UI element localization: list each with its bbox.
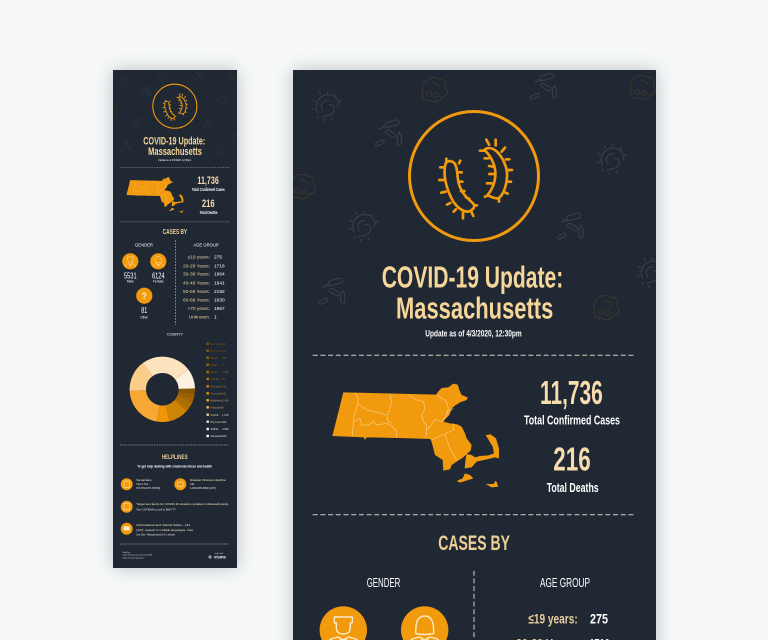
preview: gender and age section: 1967 bbox=[214, 306, 225, 312]
preview: county legend: Essex bbox=[210, 370, 218, 374]
preview panel background bbox=[113, 70, 237, 568]
preview: scaled header and summary bbox=[112, 71, 241, 236]
preview: helplines section: Samaritans bbox=[136, 478, 152, 482]
preview: county legend: 6 bbox=[222, 405, 224, 409]
preview: county heading: COUNTY bbox=[167, 332, 183, 336]
preview: county legend: Dukes bbox=[210, 363, 219, 367]
preview: gender and age section: Male bbox=[127, 280, 134, 284]
panel: small full-length infographic preview bbox=[112, 70, 241, 568]
preview: helplines section: Informational and referral hotline - 211 bbox=[136, 523, 190, 527]
preview: county legend: 3,035 bbox=[222, 427, 229, 431]
preview: gender and age section: 1 bbox=[214, 315, 217, 321]
preview: county legend: Barnstable bbox=[210, 342, 223, 346]
preview: helplines section: Target text alerts for COVID-19 situation updates in Massachusetts bbox=[136, 502, 229, 506]
panel: enlarged detail crop bbox=[290, 70, 667, 640]
icon: female bbox=[401, 606, 448, 640]
preview: county legend: Franklin bbox=[210, 377, 220, 381]
stat: total confirmed cases: Total Confirmed Cases bbox=[524, 413, 620, 428]
age group rows: 275 bbox=[590, 610, 608, 626]
heading: age group: AGE GROUP bbox=[540, 576, 590, 590]
preview: county legend: Worcester bbox=[210, 434, 222, 438]
preview: helplines section: 1-800-985-5990 (24/7) bbox=[190, 487, 216, 490]
preview: county legend: Middlesex bbox=[210, 398, 223, 402]
preview: gender and age section: 20-29 Years: bbox=[183, 263, 210, 269]
preview: county legend: 1,336 bbox=[222, 370, 229, 374]
preview: county legend: Plymouth bbox=[210, 420, 222, 424]
preview: gender and age section: 1716 bbox=[214, 263, 225, 269]
title bbox=[382, 260, 563, 325]
heading: gender: GENDER bbox=[367, 576, 400, 590]
preview: gender and age section: ≤19 years: bbox=[188, 255, 210, 261]
preview: gender and age section: 6124 bbox=[152, 271, 165, 280]
preview: scaled header and summary: Total Confirmed Cases bbox=[192, 187, 225, 192]
title: Massachusetts bbox=[396, 290, 553, 325]
preview: helplines section: 877-870-4673 (HOPE) bbox=[136, 487, 161, 490]
preview: gender and age section: 30-39 Years: bbox=[183, 272, 210, 278]
preview: gender and age section: 60-69 Years: bbox=[183, 297, 210, 303]
preview: county legend: Hampshire bbox=[210, 391, 224, 395]
preview: helplines section: Disaster Distress Helpline bbox=[190, 478, 226, 482]
preview: gender and age section: ? bbox=[142, 291, 147, 301]
preview: helplines section: Call or Text bbox=[136, 483, 149, 486]
stat: total confirmed cases bbox=[524, 375, 620, 428]
preview: gender and age section: 81 bbox=[141, 306, 148, 315]
preview: gender and age section: Unknown: bbox=[189, 315, 210, 321]
preview: helplines section: https://www.mass.gov/covid19 bbox=[123, 554, 153, 557]
stat: total deaths bbox=[547, 442, 599, 495]
preview: helplines section: Built by: bbox=[123, 551, 131, 554]
preview: county legend: Berkshire bbox=[210, 349, 222, 353]
preview: county legend: Hampden bbox=[210, 384, 222, 388]
preview: gender and age section bbox=[122, 240, 225, 325]
preview: scaled header and summary: Total Deaths bbox=[200, 210, 218, 215]
preview: county legend: 64 bbox=[222, 377, 225, 381]
preview: county legend: 7 bbox=[222, 363, 224, 367]
preview: scaled header and summary: COVID-19 Update: bbox=[143, 135, 205, 147]
preview: county donut chart bbox=[138, 365, 187, 414]
preview: gender and age section: 1941 bbox=[214, 280, 225, 286]
preview: gender and age section: 275 bbox=[214, 255, 222, 261]
preview: county legend: 666 bbox=[222, 420, 227, 424]
stat: total deaths: 216 bbox=[553, 442, 591, 479]
preview: gender and age section: 5531 bbox=[124, 271, 137, 280]
preview: helplines section: HELPLINES bbox=[162, 454, 188, 461]
preview: scaled header and summary: 11,736 bbox=[197, 175, 219, 187]
preview: county legend: Norfolk bbox=[210, 413, 219, 417]
age group rows bbox=[516, 610, 610, 640]
preview: county legend: 1,198 bbox=[222, 413, 229, 417]
preview: helplines section: To get help dealing with emotional stress and health bbox=[137, 465, 213, 469]
preview: helplines section: https://www.mgov.gov bbox=[123, 556, 145, 559]
preview: county legend: Suffolk bbox=[210, 427, 219, 431]
icon: bacteria in circle bbox=[410, 112, 538, 240]
age group rows: ≤19 years: bbox=[528, 610, 578, 626]
preview: gender and age section: 1964 bbox=[214, 272, 225, 278]
preview: scaled header and summary: CASES BY bbox=[163, 228, 187, 236]
preview: county legend: 281 bbox=[222, 342, 227, 346]
preview: county legend: Nantucket bbox=[210, 405, 222, 409]
preview: gender and age section: 40-49 Years: bbox=[183, 280, 210, 286]
preview: gender and age section: Other bbox=[140, 315, 149, 319]
preview: county legend: 381 bbox=[222, 356, 227, 360]
preview: gender and age section: 1630 bbox=[214, 297, 225, 303]
detail panel background bbox=[293, 70, 656, 640]
stat: total confirmed cases: 11,736 bbox=[540, 375, 603, 412]
preview: gender and age section: GENDER bbox=[135, 242, 153, 248]
preview: county legend bbox=[206, 342, 229, 438]
preview: county legend: 131 bbox=[222, 391, 227, 395]
preview: county legend: 919 bbox=[222, 434, 227, 438]
preview: scaled header and summary: Massachusetts bbox=[148, 146, 202, 158]
preview: gender and age section: 2192 bbox=[214, 289, 225, 295]
background virus pattern bbox=[290, 73, 667, 319]
preview: scaled header and summary: Update as of 4/3/2020, 12:30pm bbox=[158, 158, 191, 162]
preview: gender and age section: >70 years: bbox=[187, 306, 210, 312]
update timestamp: Update as of 4/3/2020, 12:30pm bbox=[425, 329, 522, 339]
preview: helplines section: Text COVIDMA to cell to 888-777 bbox=[136, 508, 176, 512]
preview: helplines section bbox=[120, 445, 229, 560]
preview: helplines section: visme bbox=[214, 554, 227, 560]
preview: helplines section: (24/7, support in multiple languages, free) bbox=[136, 528, 193, 532]
preview: helplines section: Live Chat - Massachusetts 2-1-1 website bbox=[136, 534, 176, 536]
preview: county legend: 761 bbox=[222, 384, 227, 388]
preview: scaled header and summary: 216 bbox=[202, 198, 215, 210]
preview: county legend: Bristol bbox=[210, 356, 218, 360]
map: Massachusetts counties bbox=[332, 384, 499, 487]
preview: county legend: 2,148 bbox=[222, 398, 229, 402]
preview: helplines section: built with bbox=[215, 552, 224, 555]
stat: total deaths: Total Deaths bbox=[547, 480, 599, 495]
icon: male bbox=[320, 606, 367, 640]
preview: gender and age section: Female bbox=[153, 280, 164, 284]
title: COVID-19 Update: bbox=[382, 260, 563, 295]
preview: gender and age section: AGE GROUP bbox=[193, 242, 219, 248]
preview: gender and age section: 50-59 Years: bbox=[183, 289, 210, 295]
heading: cases by: CASES BY bbox=[438, 532, 510, 555]
preview: county legend: 183 bbox=[222, 349, 227, 353]
preview: helplines section: Call bbox=[190, 483, 195, 486]
